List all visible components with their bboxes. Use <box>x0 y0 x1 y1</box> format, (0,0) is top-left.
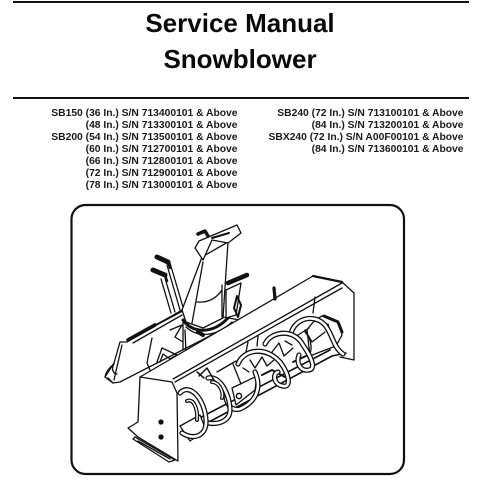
right column: model and serial numbers: SB240 (72 In.) S/N 713100101 & Above <box>277 108 464 118</box>
left column: model and serial numbers: (78 In.) S/N 713000101 & Above <box>86 180 238 190</box>
auger flight 4 <box>265 333 313 370</box>
illustration frame <box>72 205 404 474</box>
left column: model and serial numbers: (72 In.) S/N 712900101 & Above <box>86 168 238 178</box>
left column: model and serial numbers: SB150 (36 In.) S/N 713400101 & Above <box>51 108 238 118</box>
auger flight 3 <box>217 351 288 386</box>
auger shaft <box>180 350 346 441</box>
control levers <box>153 257 183 313</box>
right column: model and serial numbers <box>268 108 464 154</box>
right column: model and serial numbers: SBX240 (72 In.) S/N A00F00101 & Above <box>269 132 464 142</box>
title: Service Manual <box>145 8 335 38</box>
mounting frame <box>105 310 240 383</box>
right column: model and serial numbers: (84 In.) S/N 713600101 & Above <box>312 144 464 154</box>
auger lower flight <box>226 372 258 409</box>
auger flight 5 <box>291 318 343 354</box>
subtitle: Snowblower <box>163 44 317 74</box>
auger drive hub <box>305 316 342 358</box>
left column: model and serial numbers: (48 In.) S/N 713300101 & Above <box>86 120 238 130</box>
auger flight 1 <box>180 390 206 437</box>
illustration: snowblower attachment <box>105 225 354 462</box>
left column: model and serial numbers: (60 In.) S/N 712700101 & Above <box>86 144 238 154</box>
left column: model and serial numbers: SB200 (54 In.) S/N 713500101 & Above <box>51 132 238 142</box>
auger flight 2 <box>197 368 230 423</box>
left column: model and serial numbers: (66 In.) S/N 712800101 & Above <box>86 156 238 166</box>
right column: model and serial numbers: (84 In.) S/N 713200101 & Above <box>312 120 464 130</box>
right control handle and linkage <box>226 275 247 318</box>
housing <box>143 276 354 461</box>
end plate with mounting holes <box>128 377 178 462</box>
discharge chute <box>182 225 241 335</box>
left column: model and serial numbers <box>51 108 238 190</box>
